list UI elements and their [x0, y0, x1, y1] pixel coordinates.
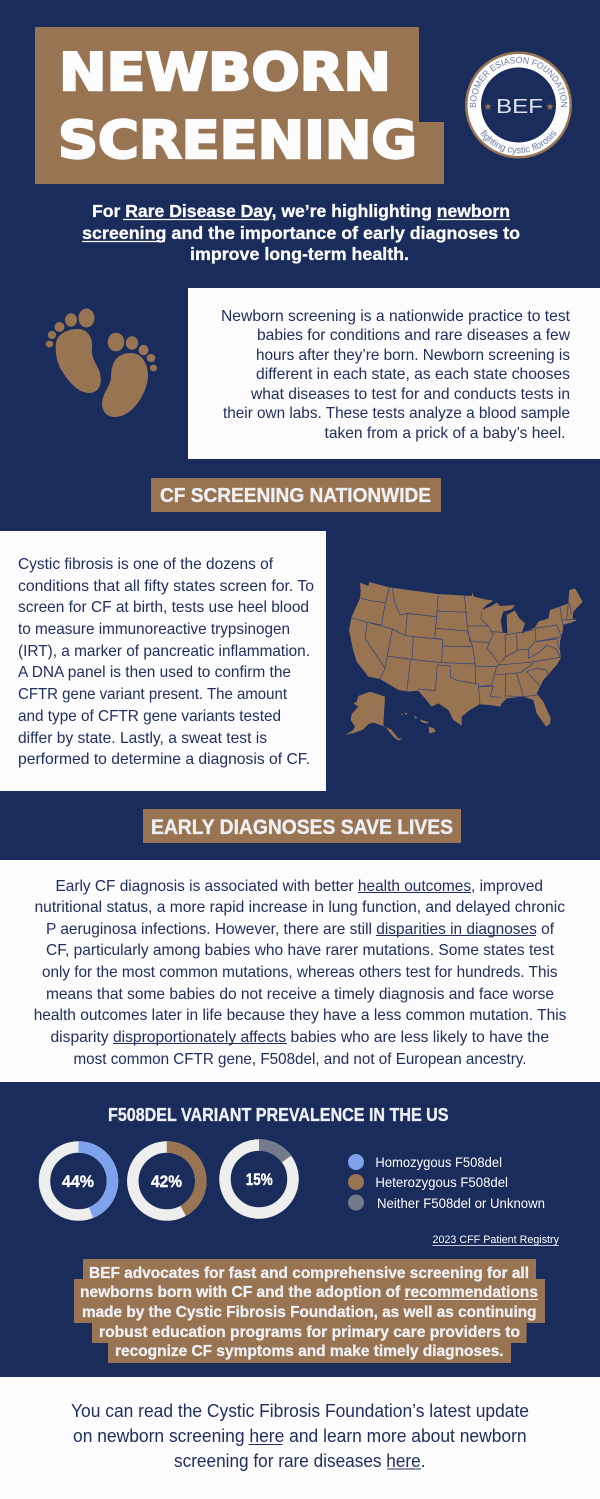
callout: BEF advocacy: recognize CF symptoms and make timely diagnoses. — [115, 1343, 504, 1360]
panel: newborn screening description — [188, 288, 600, 459]
panel: early diagnosis text: P aeruginosa infections. However, there are still disparities in diagnoses of — [46, 921, 555, 938]
donut chart: 42% heterozygous: 42% — [151, 1172, 182, 1191]
callout: BEF advocacy: newborns born with CF and the adoption of recommendations — [80, 1284, 538, 1301]
callout: BEF advocacy: robust education programs for primary care providers to — [99, 1324, 520, 1341]
panel: CF screening description: to measure immunoreactive trypsinogen — [18, 621, 290, 638]
legend: Homozygous F508del — [375, 1154, 502, 1170]
panel: newborn screening description: taken from a prick of a baby’s heel. — [324, 425, 566, 442]
panel: CF screening description: A DNA panel is then used to confirm the — [18, 664, 291, 681]
source note: 2023 CFF Patient Registry — [432, 1234, 559, 1246]
panel: CF screening description: performed to determine a diagnosis of CF. — [18, 751, 310, 768]
panel: early diagnosis text: only for the most common mutations, whereas others test for hundreds. This — [42, 964, 558, 981]
callout: BEF advocacy: made by the Cystic Fibrosis Foundation, as well as continuing — [82, 1304, 536, 1321]
heading: F508del variant prevalence: F508DEL VARIANT PREVALENCE IN THE US — [108, 1105, 448, 1125]
panel: newborn screening description: what diseases to test for and conducts tests in — [250, 386, 570, 403]
icon: BEF logo: ★ — [546, 102, 555, 113]
panel: early diagnosis text — [0, 860, 600, 1082]
legend: Neither F508del or Unknown — [377, 1195, 545, 1211]
heading: CF screening nationwide — [151, 478, 441, 512]
panel: early diagnosis text: Early CF diagnosis is associated with better health outcomes, improved — [56, 878, 543, 895]
icon: BEF logo: fighting cystic fibrosis — [480, 130, 556, 155]
panel: CF screening description: differ by state. Lastly, a sweat test is — [18, 730, 267, 747]
heading: early diagnoses save lives: EARLY DIAGNOSES SAVE LIVES — [151, 816, 453, 839]
panel: newborn screening description: different in each state, as each state chooses — [256, 366, 570, 383]
panel: CF screening description: conditions that all fifty states screen for. To — [18, 578, 314, 595]
icon: baby feet — [46, 308, 157, 417]
panel: early diagnosis text: disparity disproportionately affects babies who are less likely to have the — [50, 1029, 549, 1046]
panel: early diagnosis text: CF, particularly among babies who have rarer mutations. Some states test — [46, 942, 555, 959]
donut chart: 42% heterozygous — [133, 1147, 201, 1215]
panel: newborn screening description: their own labs. These tests analyze a blood sample — [223, 405, 570, 422]
map: United States — [345, 582, 583, 741]
icon: BEF logo — [465, 52, 572, 158]
panel: newborn screening description: Newborn screening is a nationwide practice to test — [221, 308, 571, 325]
panel: further reading: You can read the Cystic Fibrosis Foundation’s latest update — [71, 1401, 529, 1421]
panel: CF screening description: (IRT), a marker of pancreatic inflammation. — [18, 643, 310, 660]
panel: newborn screening description: babies for conditions and rare diseases a few — [257, 327, 570, 344]
panel: CF screening description: screen for CF at birth, tests use heel blood — [18, 599, 309, 616]
heading: early diagnoses save lives — [143, 809, 461, 843]
donut chart: 15% neither — [225, 1145, 293, 1213]
title: newborn screening: SCREENING — [58, 111, 417, 171]
icon: BEF logo: BEF — [496, 95, 543, 118]
panel: early diagnosis text: means that some babies do not receive a timely diagnosis and face worse — [46, 986, 554, 1003]
panel: further reading: screening for rare diseases here. — [174, 1451, 426, 1471]
panel: early diagnosis text: health outcomes later in life because they have a less common mutation. This — [34, 1007, 566, 1024]
panel: further reading — [0, 1377, 600, 1499]
callout: BEF advocacy — [74, 1259, 545, 1363]
intro text: screening and the importance of early diagnoses to — [82, 223, 520, 243]
donut chart: 15% neither: 15% — [246, 1170, 273, 1189]
intro text: For Rare Disease Day, we’re highlighting newborn — [92, 201, 510, 221]
panel: CF screening description: CFTR gene variant present. The amount — [18, 686, 288, 703]
panel: early diagnosis text: nutritional status, a more rapid increase in lung function, and delayed chronic — [34, 899, 565, 916]
panel: CF screening description: and type of CFTR gene variants tested — [18, 708, 281, 725]
panel: CF screening description: Cystic fibrosis is one of the dozens of — [18, 556, 274, 573]
callout: BEF advocacy: BEF advocates for fast and comprehensive screening for all — [89, 1265, 529, 1282]
intro text: improve long-term health. — [190, 244, 409, 264]
icon: BEF logo: BOOMER ESIASON FOUNDATION — [470, 56, 568, 108]
donut chart: 44% homozygous — [44, 1147, 112, 1215]
title: newborn screening: NEWBORN — [59, 43, 391, 103]
panel: further reading: on newborn screening here and learn more about newborn — [73, 1426, 527, 1446]
legend — [348, 1154, 545, 1211]
legend: Heterozygous F508del — [375, 1174, 508, 1190]
donut chart: 44% homozygous: 44% — [62, 1172, 94, 1191]
panel: CF screening description — [0, 531, 326, 791]
panel: early diagnosis text: most common CFTR gene, F508del, and not of European ancestry. — [74, 1051, 526, 1068]
panel: newborn screening description: hours after they’re born. Newborn screening is — [256, 347, 570, 364]
title: newborn screening — [35, 27, 444, 184]
heading: CF screening nationwide: CF SCREENING NATIONWIDE — [160, 485, 431, 507]
intro text — [82, 201, 520, 264]
icon: BEF logo: ★ — [484, 102, 493, 113]
